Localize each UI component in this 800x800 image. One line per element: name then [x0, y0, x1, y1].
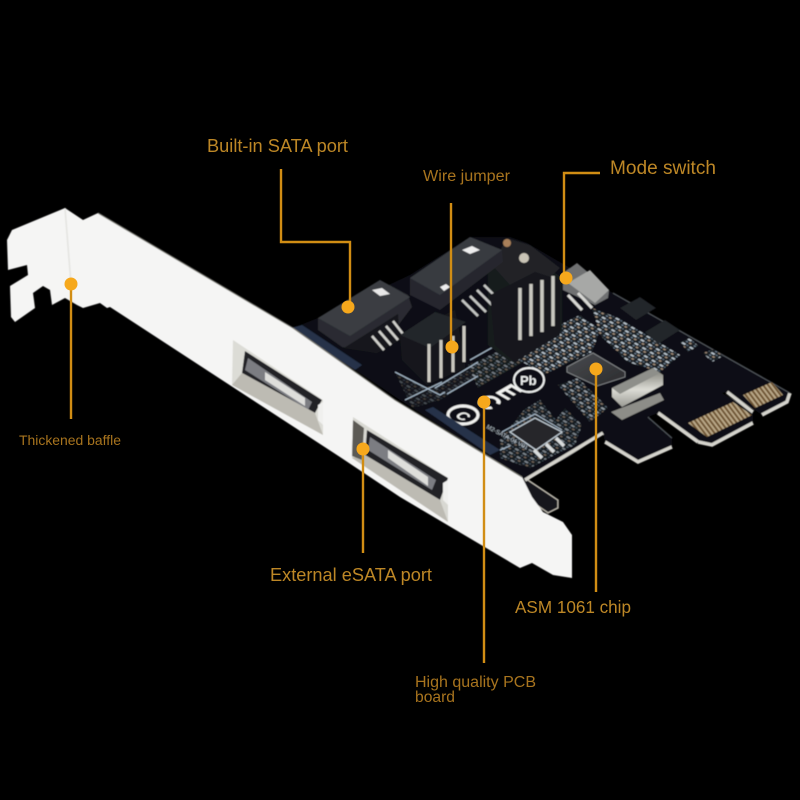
Pb mark: Pb — [520, 373, 537, 388]
wire jumper left — [400, 310, 465, 385]
eSATA port upper — [232, 340, 323, 435]
callout: Thickened baffle — [19, 278, 121, 448]
wire jumper right — [490, 272, 560, 362]
eSATA port lower — [352, 417, 448, 522]
metal bracket — [7, 208, 572, 578]
crystal oscillator — [611, 368, 664, 420]
small ICs — [620, 297, 656, 320]
board silkscreen traces — [395, 332, 520, 400]
product: SATA expansion card — [7, 208, 790, 578]
callout: Mode switch: Mode switch — [610, 157, 716, 179]
CE and certification marks — [448, 381, 528, 424]
callout: External eSATA port — [270, 442, 432, 585]
callout: Mode switch — [560, 157, 716, 284]
callout: High quality PCB board — [415, 396, 536, 706]
component clusters — [515, 315, 600, 374]
CE and certification marks: C — [451, 409, 475, 424]
PCB board — [290, 237, 790, 480]
regulator — [510, 418, 562, 450]
gold fingers — [688, 402, 752, 437]
front SATA port — [318, 280, 412, 353]
mode switch — [563, 263, 609, 305]
callout: Built-in SATA port: Built-in SATA port — [207, 136, 348, 156]
right connector rear — [488, 250, 562, 362]
callout: External eSATA port: External eSATA port — [270, 565, 432, 585]
CE and certification marks: C — [468, 391, 508, 414]
callout: ASM 1061 chip: ASM 1061 chip — [515, 597, 631, 617]
rear mounting tab behind bracket — [515, 476, 558, 513]
callout: Wire jumper — [423, 168, 510, 354]
rear SATA port — [410, 237, 503, 310]
callout: Thickened baffle: Thickened baffle — [19, 433, 121, 448]
ASM 1061 chip — [567, 353, 625, 386]
callout: Wire jumper: Wire jumper — [423, 168, 510, 185]
callout: High quality PCB board: board — [415, 689, 455, 706]
Pb mark — [514, 368, 544, 392]
blue slots beside bracket — [290, 325, 362, 370]
callout: ASM 1061 chip — [515, 362, 631, 617]
PCB board: M2-SATA-01 V01 — [485, 424, 529, 452]
CE and certification marks: E — [489, 381, 528, 404]
built-in SATA connectors — [318, 237, 609, 385]
callout: Built-in SATA port — [207, 136, 354, 314]
callout: High quality PCB board: High quality PCB — [415, 674, 536, 691]
